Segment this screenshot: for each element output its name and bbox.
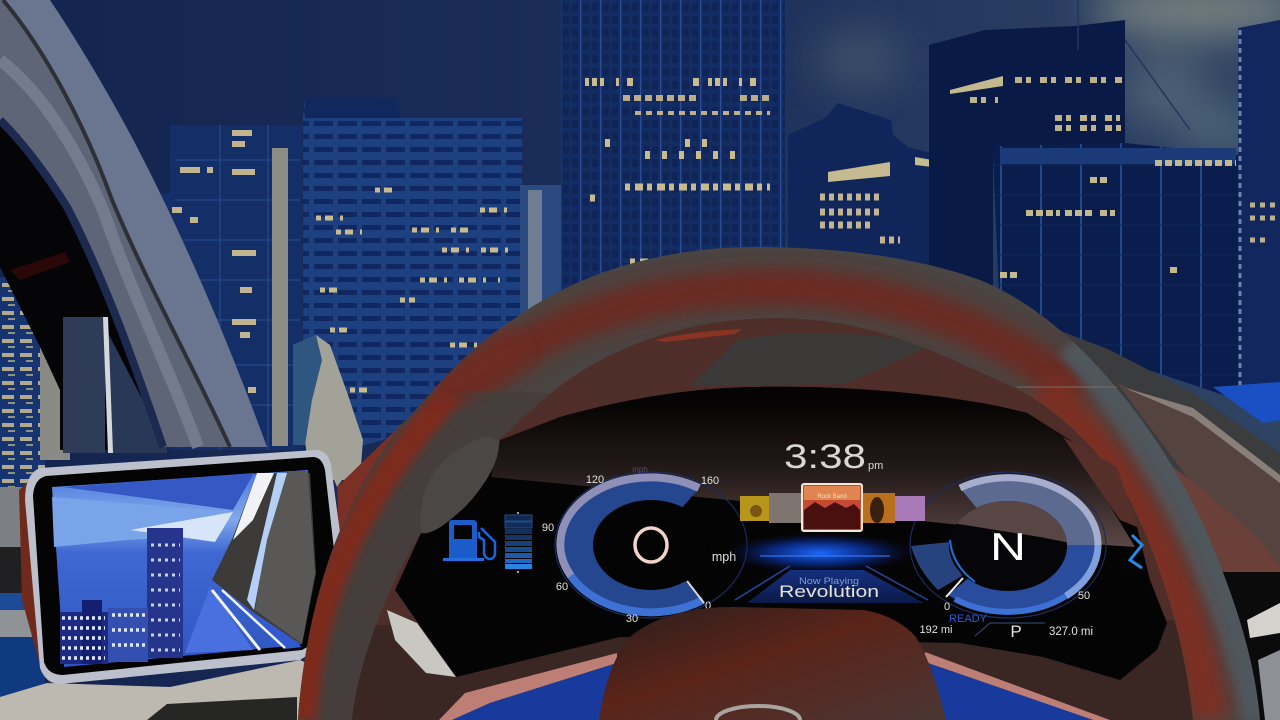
inner pillar band: [0, 0, 230, 447]
now playing panel: [735, 566, 928, 603]
reflected sky band: [63, 473, 254, 510]
darker left lower section: [298, 390, 512, 719]
speedometer labels: 90: [542, 522, 554, 534]
clouds: [815, 0, 1280, 152]
album carousel: Rock Band: [817, 494, 847, 500]
speedometer labels: 60: [556, 581, 568, 593]
large office block: [303, 97, 522, 460]
outer pillar band: [3, 0, 267, 447]
gauge labels and trip data: 327.0 mi: [1049, 626, 1093, 638]
instrument cluster screen: [395, 387, 1167, 680]
gear and range gauge: [910, 472, 1106, 618]
now playing panel: Revolution: [779, 583, 879, 601]
gear readout: N: [990, 526, 1026, 569]
dashboard right side: [1040, 323, 1280, 720]
lower dash trim: [439, 652, 1110, 720]
left spoke bulge: [420, 437, 499, 533]
album carousel: [740, 484, 925, 531]
A-pillar and door frame: [0, 0, 267, 453]
left edge building: [0, 277, 45, 487]
steering wheel rim: [290, 240, 1270, 720]
stepped tower: [788, 103, 969, 320]
gauge labels and trip data: 50: [1078, 590, 1090, 602]
wheel hub: [599, 607, 946, 720]
side mirror: [19, 450, 341, 684]
speedometer labels: 30: [626, 613, 638, 625]
red outer lower left: [304, 392, 452, 720]
battery level bars: [505, 512, 532, 573]
speedometer gauge: mph: [632, 465, 648, 474]
silver stalk: [387, 610, 456, 677]
right edge tower: [1238, 20, 1280, 385]
reflected tower: [147, 528, 183, 658]
column block: [993, 143, 1238, 400]
right inner wedge: [1063, 437, 1137, 527]
gauge labels and trip data: P: [1010, 622, 1022, 641]
gauge centre: [949, 501, 1067, 591]
reflected city: [60, 600, 148, 664]
speedometer labels: 120: [586, 474, 604, 486]
gauge labels and trip data: READY: [949, 613, 988, 625]
grey-blue right side: [1075, 340, 1262, 720]
hub emblem: [716, 706, 800, 720]
right side blue icon: [1130, 535, 1142, 568]
gauge labels and trip data: [919, 590, 1093, 641]
city skyline: [0, 0, 1280, 487]
dark tall block: [929, 20, 1125, 330]
wheel rim seam: [1017, 386, 1117, 388]
speedometer labels: 0: [705, 600, 711, 612]
red inner lower right: [1040, 390, 1210, 720]
narrow pale building: [520, 185, 562, 345]
tall central tower: [561, 0, 785, 310]
gauge labels and trip data: 192 mi: [919, 624, 953, 636]
red upper sheen: [440, 287, 1080, 420]
clock: [784, 438, 883, 476]
left tower: [158, 193, 214, 373]
speedometer labels: [542, 474, 736, 625]
gauge labels and trip data: 0: [944, 601, 950, 613]
ground strip left: [0, 487, 345, 720]
clock: 3:38: [784, 438, 866, 476]
speedometer gauge: [555, 465, 747, 618]
mirror view: [52, 470, 316, 667]
now playing panel: Now Playing: [799, 576, 859, 587]
dashboard inside wheel: [320, 312, 1200, 720]
speed readout: [635, 528, 667, 562]
speedometer labels: mph: [712, 550, 736, 564]
speedometer labels: 160: [701, 475, 719, 487]
clock: pm: [868, 460, 883, 472]
pale sculpture: [293, 335, 363, 480]
blue glow strip: [725, 533, 915, 573]
reflected car body: [212, 473, 316, 645]
fuel icon: [443, 520, 495, 561]
